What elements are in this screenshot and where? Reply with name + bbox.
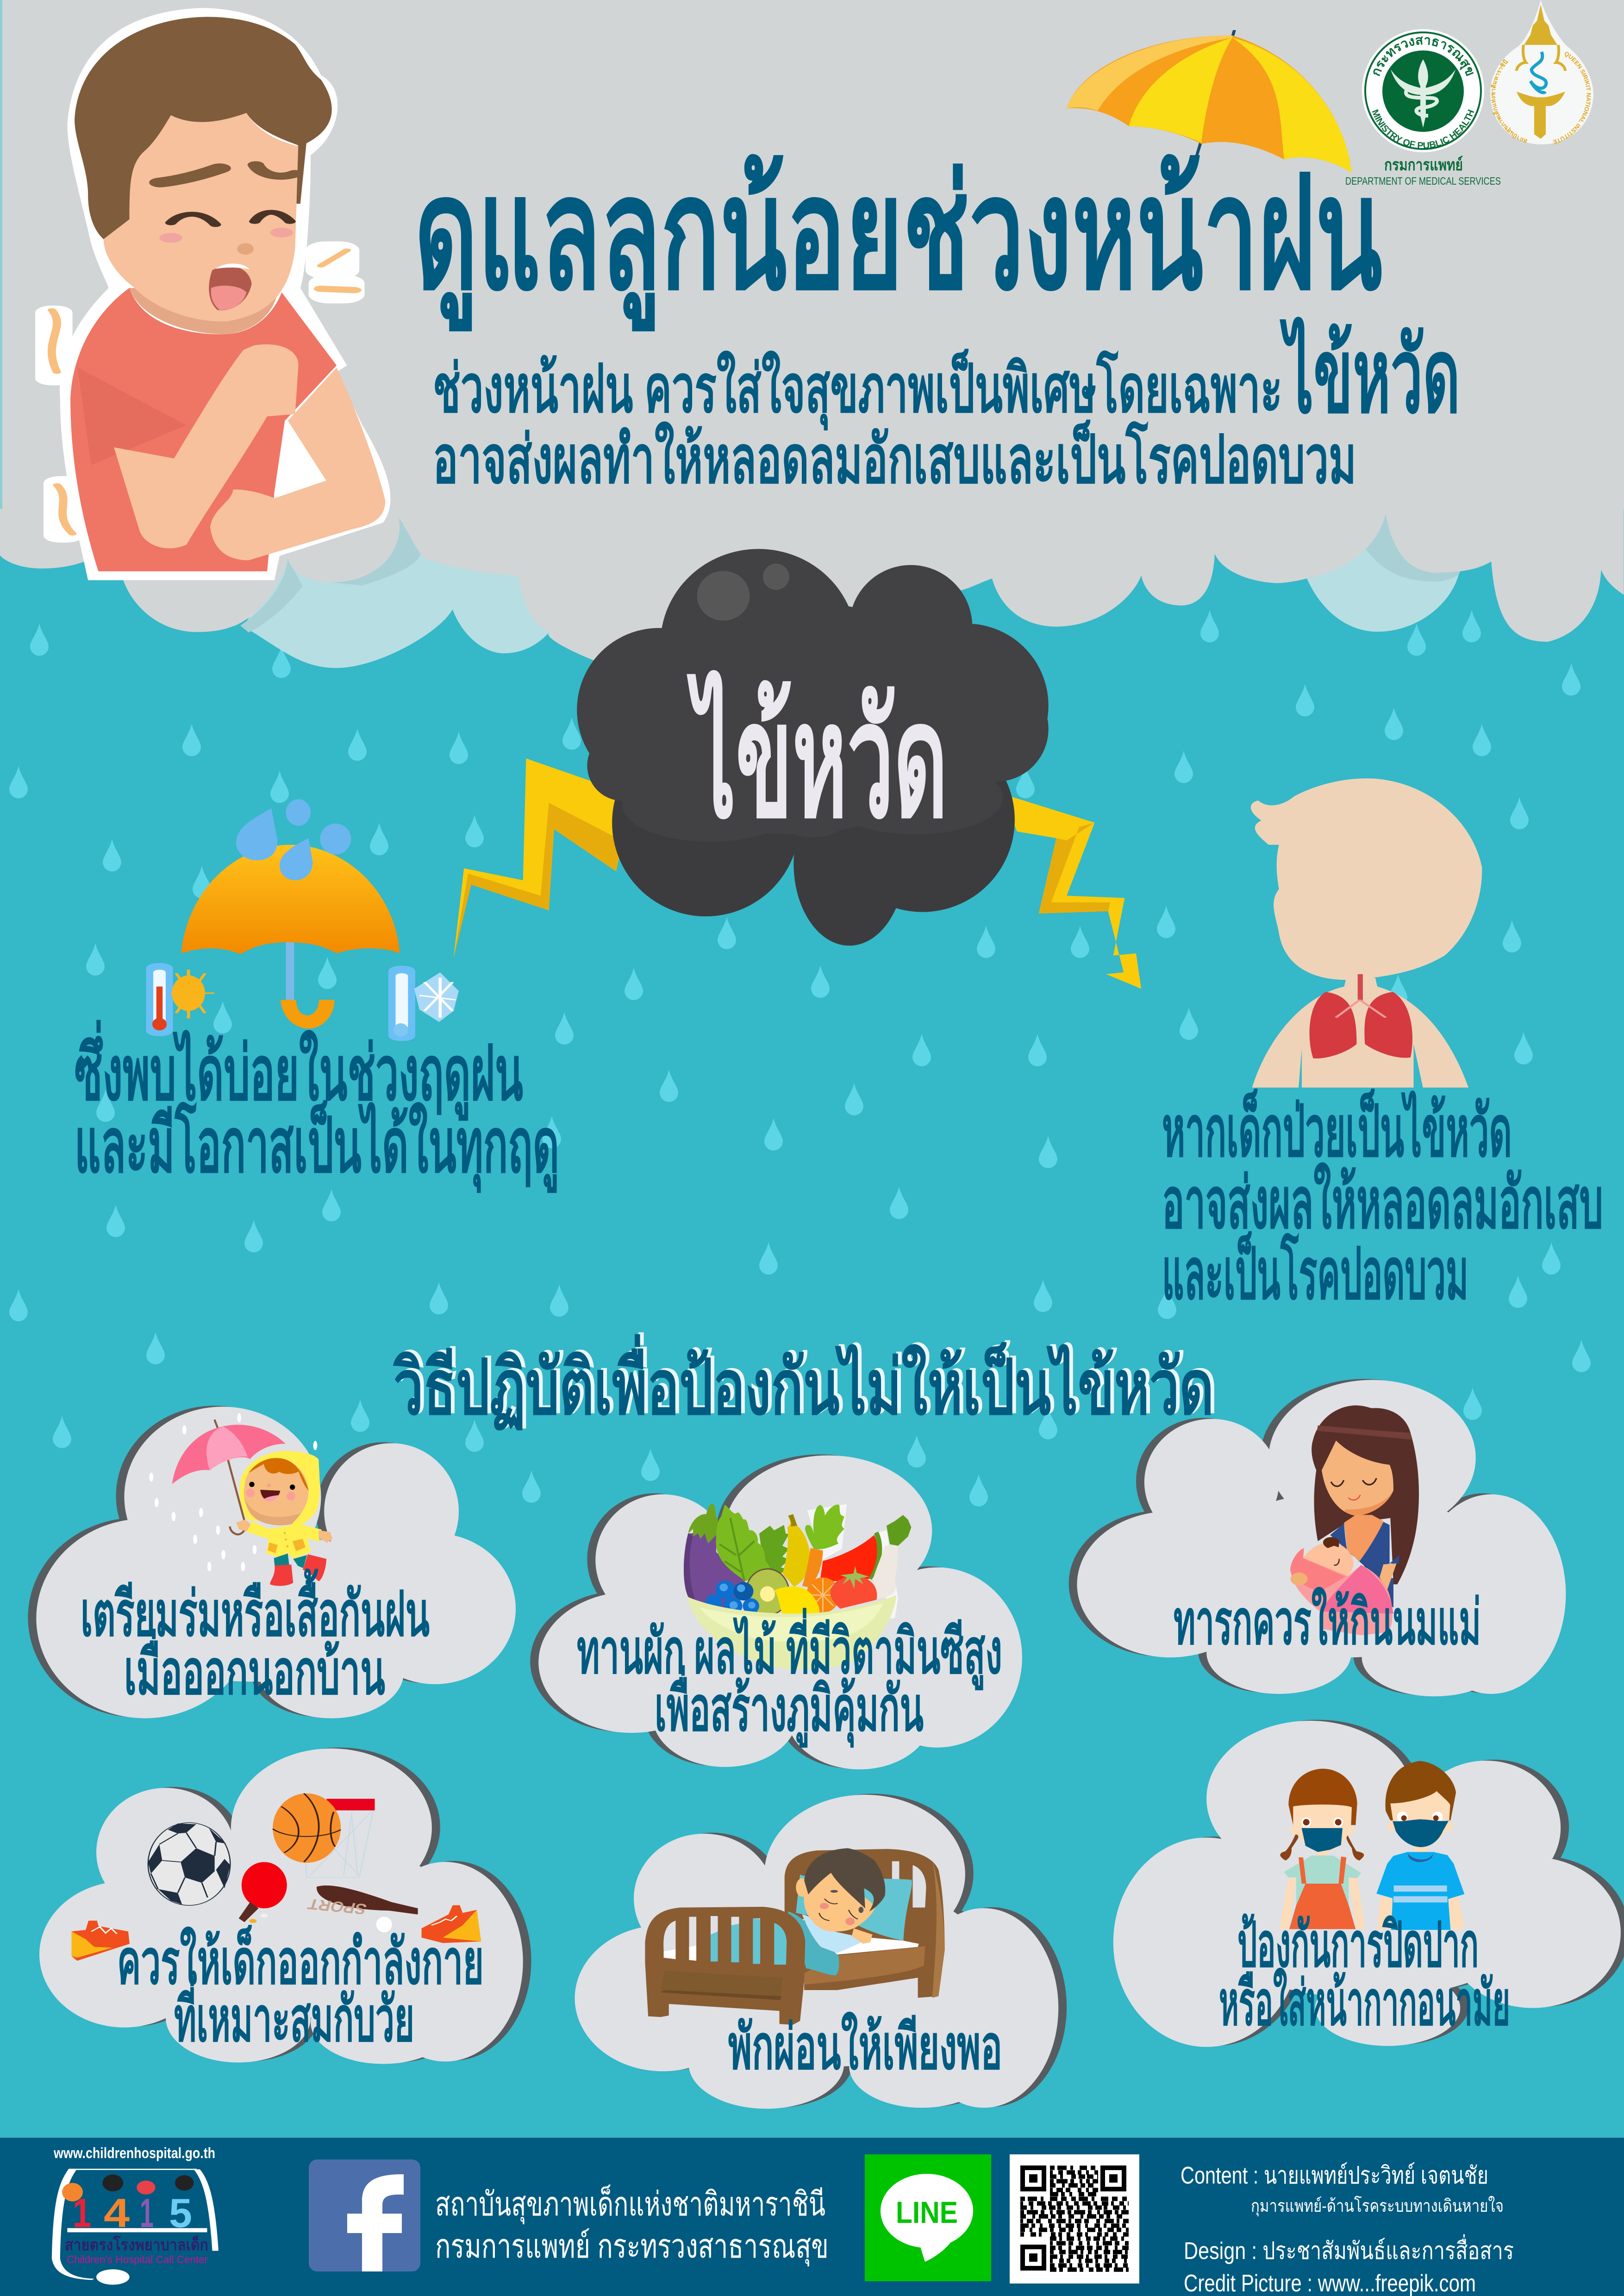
- footer credits: กุมารแพทย์-ด้านโรคระบบทางเดินหายใจ: [1251, 2196, 1504, 2216]
- footer icon: LINE: LINE: [896, 2195, 958, 2229]
- illustration: coughing boy: [35, 8, 390, 580]
- icon: fruit bowl: [684, 1504, 912, 1669]
- panel: vegetables cloud: [530, 1455, 1022, 1769]
- grey rain cloud header: [0, 0, 1624, 668]
- heading: prevention: [393, 1332, 1218, 1431]
- text: exercise advice: ที่เหมาะสมกับวัย: [174, 1975, 414, 2054]
- footer bar: [0, 2138, 1624, 2296]
- label: department English: DEPARTMENT OF MEDICAL SERVICES: [1345, 175, 1501, 187]
- panel: exercise cloud: [39, 1748, 531, 2064]
- panel: breastfeeding cloud: [1069, 1379, 1566, 1696]
- icon: children wearing masks: [1279, 1761, 1464, 1930]
- logo: Ministry of Public Health: [1362, 29, 1484, 152]
- footer icon: call center 1415: Children's Hospital Call Center: [67, 2253, 208, 2265]
- heading: prevention: วิธีปฏิบัติเพื่อป้องกันไม่ให้เป็นไข้หวัด: [396, 1332, 1218, 1429]
- subtitle highlight: ไข้หวัด: [1280, 317, 1460, 434]
- dark storm cloud: [577, 549, 1049, 946]
- illustration: orange umbrella with thermometers: [146, 799, 459, 1041]
- footer icon: call center 1415: 5: [169, 2190, 192, 2236]
- icon: mother and baby: [1290, 1406, 1419, 1635]
- footer icon: call center 1415: [56, 2169, 215, 2285]
- icon: child with umbrella: [149, 1413, 332, 1586]
- footer icon: facebook: [309, 2159, 420, 2271]
- text: vegetables advice: ทานผัก ผลไม้ ที่มีวิตามินซีสูง: [577, 1607, 1002, 1691]
- label: department Thai: กรมการแพทย์: [1384, 156, 1463, 174]
- panel: rest cloud: [575, 1794, 1067, 2109]
- logo: Queen Sirikit institute: สถาบันสุขภาพเด็กแห่งชาติมหาราชินี: [1489, 58, 1528, 145]
- text: exercise advice: ควรให้เด็กออกกำลังกาย: [117, 1924, 484, 1997]
- panel: raincoat cloud: [28, 1406, 516, 1718]
- footer icon: call center 1415: 4: [104, 2190, 130, 2236]
- illustration: yellow umbrella: [1067, 30, 1351, 175]
- panel: mask cloud: [1113, 1720, 1624, 2047]
- footer QR code: [1010, 2154, 1139, 2284]
- footer icon: LINE: [865, 2154, 991, 2281]
- heading: prevention: วิธีปฏิบัติเพื่อป้องกันไม่ให้เป็นไข้หวัด: [393, 1334, 1214, 1431]
- text: seasonal note: และมีโอกาสเป็นได้ในทุกฤดู: [75, 1100, 559, 1193]
- lightning right: [1002, 794, 1141, 989]
- storm cloud label: ไข้หวัด: [686, 669, 948, 850]
- text: raincoat advice: เตรียมร่มหรือเสื้อกันฝน: [81, 1568, 430, 1649]
- footer icon: call center 1415: สายตรงโรงพยาบาลเด็ก: [65, 2235, 208, 2254]
- logo: Ministry of Public Health: MINISTRY OF PUBLIC HEALTH: [1369, 108, 1476, 151]
- logo: Ministry of Public Health: กระทรวงสาธารณสุข: [1368, 33, 1478, 78]
- footer website: www.childrenhospital.go.th: [53, 2145, 215, 2161]
- text: vegetables advice: [577, 1607, 1002, 1748]
- footer credits: Design : ประชาสัมพันธ์และการสื่อสาร: [1184, 2234, 1514, 2265]
- lightning left: [454, 759, 632, 958]
- text: complication note: [1162, 1088, 1603, 1314]
- footer credits: [1181, 2162, 1514, 2296]
- footer icon: call center 1415: 1: [140, 2190, 154, 2236]
- text: seasonal note: ซึ่งพบได้บ่อยในช่วงฤดูฝน: [75, 1020, 523, 1121]
- text: exercise advice: [117, 1924, 484, 2054]
- raindrops: [9, 610, 1591, 1506]
- text: raincoat advice: เมื่อออกนอกบ้าน: [124, 1628, 385, 1707]
- illustration: child silhouette with lungs: [1251, 778, 1482, 1088]
- text: rest advice: พักผ่อนให้เพียงพอ: [728, 2011, 1002, 2082]
- text: mask advice: [1219, 1910, 1510, 2038]
- text: vegetables advice: เพื่อสร้างภูมิคุ้มกัน: [655, 1665, 924, 1748]
- icon: sports equipment: SPORT: [306, 1896, 369, 1917]
- icon: sleeping child in bed: [645, 1848, 945, 2025]
- footer text: institute: สถาบันสุขภาพเด็กแห่งชาติมหาราชินี: [435, 2184, 825, 2224]
- text: raincoat advice: [81, 1568, 430, 1707]
- icon: sports equipment: [71, 1793, 481, 1961]
- footer icon: call center 1415: 1: [73, 2190, 91, 2236]
- footer text: institute: [435, 2184, 829, 2266]
- text: seasonal note: [75, 1020, 559, 1193]
- footer text: institute: กรมการแพทย์ กระทรวงสาธารณสุข: [435, 2228, 829, 2266]
- footer credits: Content : นายแพทย์ประวิทย์ เจตนชัย: [1181, 2162, 1488, 2189]
